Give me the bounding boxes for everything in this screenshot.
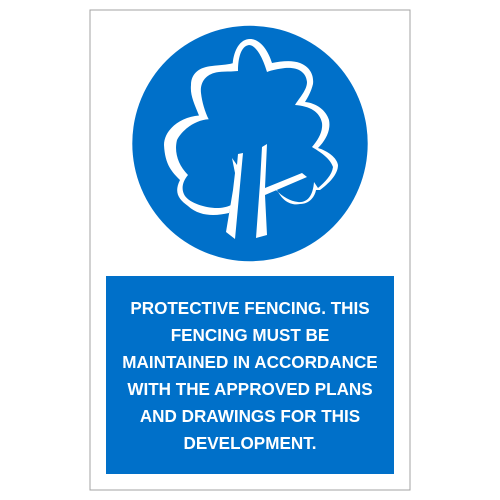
right trunk and branch (256, 144, 307, 238)
panel text: PROTECTIVE FENCING. THIS (130, 299, 370, 318)
blue text panel (106, 276, 394, 474)
panel text: AND DRAWINGS FOR THIS (140, 407, 360, 426)
panel text: MAINTAINED IN ACCORDANCE (122, 353, 378, 372)
panel text: WITH THE APPROVED PLANS (127, 380, 373, 399)
panel text: FENCING MUST BE (171, 326, 329, 345)
tree canopy outline (164, 39, 338, 215)
panel text (122, 299, 378, 453)
sign border (90, 10, 410, 490)
icon: tree in blue circle (132, 26, 368, 261)
icon: tree (164, 39, 338, 239)
left trunk (226, 153, 243, 239)
blue circle (132, 26, 368, 261)
panel text: DEVELOPMENT. (184, 434, 316, 453)
